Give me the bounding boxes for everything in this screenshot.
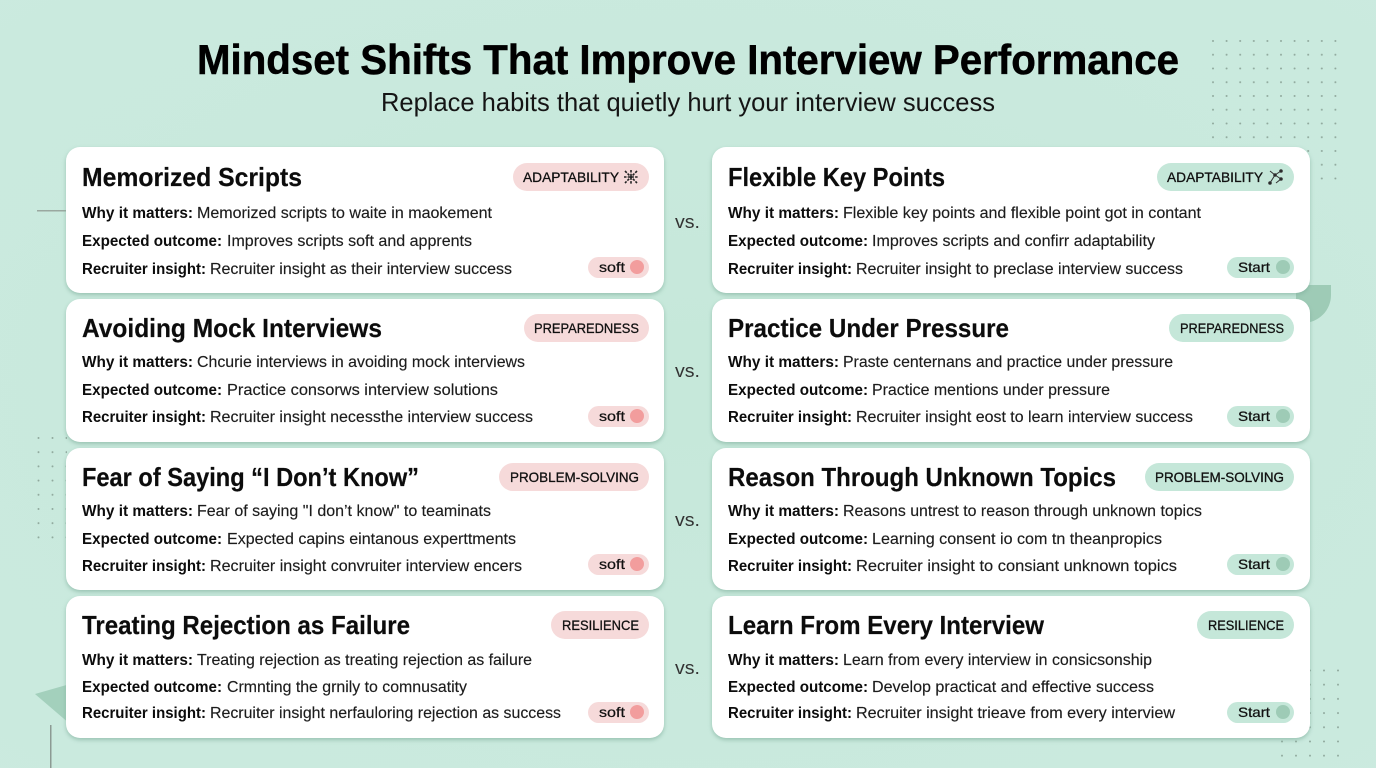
status: start: [1227, 702, 1294, 723]
expected outcome: Expected capins eintanous experttments: [227, 531, 516, 548]
why it matters: Treating rejection as treating rejection as failure: [197, 652, 532, 669]
tag: problem-solving: [1145, 463, 1294, 491]
heading: Fear of Saying “I Don’t Know”: [82, 462, 419, 492]
tag: preparedness: PREPAREDNESS: [534, 320, 639, 336]
panel: Flexible Key Points: [712, 147, 1310, 295]
why it matters: Why it matters:: [728, 205, 839, 222]
decorative line: horizontal: [37, 210, 67, 212]
decorative triangle: [35, 684, 70, 724]
expected outcome: Improves scripts soft and apprents: [227, 233, 472, 250]
why it matters: Chcurie interviews in avoiding mock interviews: [197, 354, 525, 371]
recruiter insight: Recruiter insight:: [82, 409, 206, 426]
heading: Treating Rejection as Failure: [82, 610, 410, 640]
why it matters: Why it matters:: [728, 652, 839, 669]
tag: resilience: [1197, 611, 1294, 639]
recruiter insight: Recruiter insight convruiter interview encers: [210, 558, 522, 575]
expected outcome: Crmnting the grnily to comnusatity: [227, 679, 467, 696]
tag: adaptability: [513, 163, 649, 191]
decorative quarter circle: [1296, 285, 1331, 323]
status: start: Start: [1238, 408, 1270, 424]
vs label 4: vs.: [675, 658, 700, 678]
recruiter insight: Recruiter insight eost to learn interview success: [856, 409, 1193, 426]
vs label 1: vs.: [675, 212, 700, 232]
status: start: Start: [1238, 704, 1270, 720]
status: start: [1227, 406, 1294, 427]
why it matters: Memorized scripts to waite in maokement: [197, 205, 493, 222]
recruiter insight: Recruiter insight:: [728, 409, 852, 426]
decorative dot grid: top right: [1211, 39, 1339, 180]
tag: preparedness: [1169, 314, 1294, 342]
why it matters: Praste centernans and practice under pressure: [843, 354, 1173, 371]
panel: Practice Under Pressure: [712, 299, 1310, 444]
recruiter insight: Recruiter insight necessthe interview success: [210, 409, 533, 426]
expected outcome: Expected outcome:: [82, 531, 222, 548]
decorative dot grid: bottom right: [1280, 668, 1340, 758]
vs label 3: vs.: [675, 510, 700, 530]
why it matters: Why it matters:: [82, 503, 193, 520]
why it matters: Why it matters:: [82, 205, 193, 222]
tag: adaptability: ADAPTABILITY: [523, 169, 620, 185]
recruiter insight: Recruiter insight as their interview success: [210, 261, 512, 278]
decorative dot grid: left: [37, 436, 67, 540]
expected outcome: [82, 679, 467, 696]
expected outcome: [728, 679, 1154, 696]
status: soft: [588, 702, 649, 723]
tag: preparedness: PREPAREDNESS: [1180, 320, 1284, 336]
tag: adaptability: ADAPTABILITY: [1167, 169, 1264, 185]
vs label 2: vs.: [675, 361, 700, 381]
expected outcome: [82, 531, 516, 548]
expected outcome: Expected outcome:: [728, 679, 868, 696]
status: soft: [588, 257, 649, 278]
status: soft: [588, 554, 649, 575]
why it matters: Why it matters:: [728, 503, 839, 520]
expected outcome: Practice consorws interview solutions: [227, 382, 498, 399]
recruiter insight: Recruiter insight:: [728, 558, 852, 575]
recruiter insight: Recruiter insight to preclase interview success: [856, 261, 1183, 278]
panel: Learn From Every Interview: [712, 596, 1310, 740]
heading: Practice Under Pressure: [728, 313, 1009, 343]
expected outcome: Practice mentions under pressure: [872, 382, 1110, 399]
status: start: Start: [1238, 556, 1270, 572]
why it matters: Fear of saying "I don’t know" to teaminats: [197, 503, 491, 520]
expected outcome: Develop practicat and effective success: [872, 679, 1154, 696]
tag: problem-solving: PROBLEM-SOLVING: [510, 469, 639, 485]
expected outcome: Expected outcome:: [728, 233, 868, 250]
recruiter insight: [728, 558, 1177, 575]
heading: Memorized Scripts: [82, 162, 302, 192]
expected outcome: [82, 233, 472, 250]
status: soft: soft: [599, 704, 625, 720]
tag: preparedness: [524, 314, 649, 342]
recruiter insight: Recruiter insight nerfauloring rejection as success: [210, 705, 561, 722]
why it matters: Why it matters:: [82, 354, 193, 371]
panel: Fear of Saying I Don't Know: [66, 448, 664, 592]
tag: problem-solving: [499, 463, 649, 491]
decorative line: vertical: [50, 725, 52, 768]
heading: Flexible Key Points: [728, 162, 945, 192]
status: soft: soft: [599, 556, 625, 572]
recruiter insight: Recruiter insight:: [82, 261, 206, 278]
tag: adaptability: [1157, 163, 1294, 191]
expected outcome: Expected outcome:: [728, 382, 868, 399]
recruiter insight: Recruiter insight to consiant unknown topics: [856, 558, 1177, 575]
heading: Avoiding Mock Interviews: [82, 313, 382, 343]
recruiter insight: Recruiter insight:: [728, 705, 852, 722]
tag: resilience: RESILIENCE: [562, 617, 639, 633]
expected outcome: Learning consent io com tn theanpropics: [872, 531, 1162, 548]
expected outcome: Expected outcome:: [82, 382, 222, 399]
expected outcome: Expected outcome:: [82, 679, 222, 696]
heading: Reason Through Unknown Topics: [728, 462, 1116, 492]
status: start: [1227, 257, 1294, 278]
tag: problem-solving: PROBLEM-SOLVING: [1155, 469, 1284, 485]
why it matters: Why it matters:: [728, 354, 839, 371]
recruiter insight: Recruiter insight trieave from every interview: [856, 705, 1175, 722]
expected outcome: Improves scripts and confirr adaptability: [872, 233, 1155, 250]
panel: Memorized Scripts: [66, 147, 664, 295]
expected outcome: [728, 382, 1110, 399]
why it matters: Learn from every interview in consicsonship: [843, 652, 1152, 669]
tag: resilience: RESILIENCE: [1208, 617, 1284, 633]
recruiter insight: Recruiter insight:: [82, 558, 206, 575]
why it matters: Flexible key points and flexible point got in contant: [843, 205, 1202, 222]
status: start: Start: [1238, 259, 1270, 275]
expected outcome: Expected outcome:: [82, 233, 222, 250]
expected outcome: [82, 382, 498, 399]
expected outcome: [728, 233, 1155, 250]
panel: Treating Rejection as Failure: [66, 596, 664, 740]
status: soft: [588, 406, 649, 427]
status: soft: soft: [599, 408, 625, 424]
recruiter insight: Recruiter insight:: [82, 705, 206, 722]
subtitle: Replace habits that quietly hurt your interview success: [381, 87, 995, 117]
expected outcome: [728, 531, 1162, 548]
panel: Reason Through Unknown Topics: [712, 448, 1310, 592]
why it matters: Reasons untrest to reason through unknown topics: [843, 503, 1202, 520]
tag: resilience: [551, 611, 649, 639]
title: Mindset Shifts That Improve Interview Performance: [197, 36, 1179, 83]
panel: Avoiding Mock Interviews: [66, 299, 664, 444]
status: start: [1227, 554, 1294, 575]
status: soft: soft: [599, 259, 625, 275]
recruiter insight: Recruiter insight:: [728, 261, 852, 278]
why it matters: Why it matters:: [82, 652, 193, 669]
heading: Learn From Every Interview: [728, 610, 1045, 640]
expected outcome: Expected outcome:: [728, 531, 868, 548]
